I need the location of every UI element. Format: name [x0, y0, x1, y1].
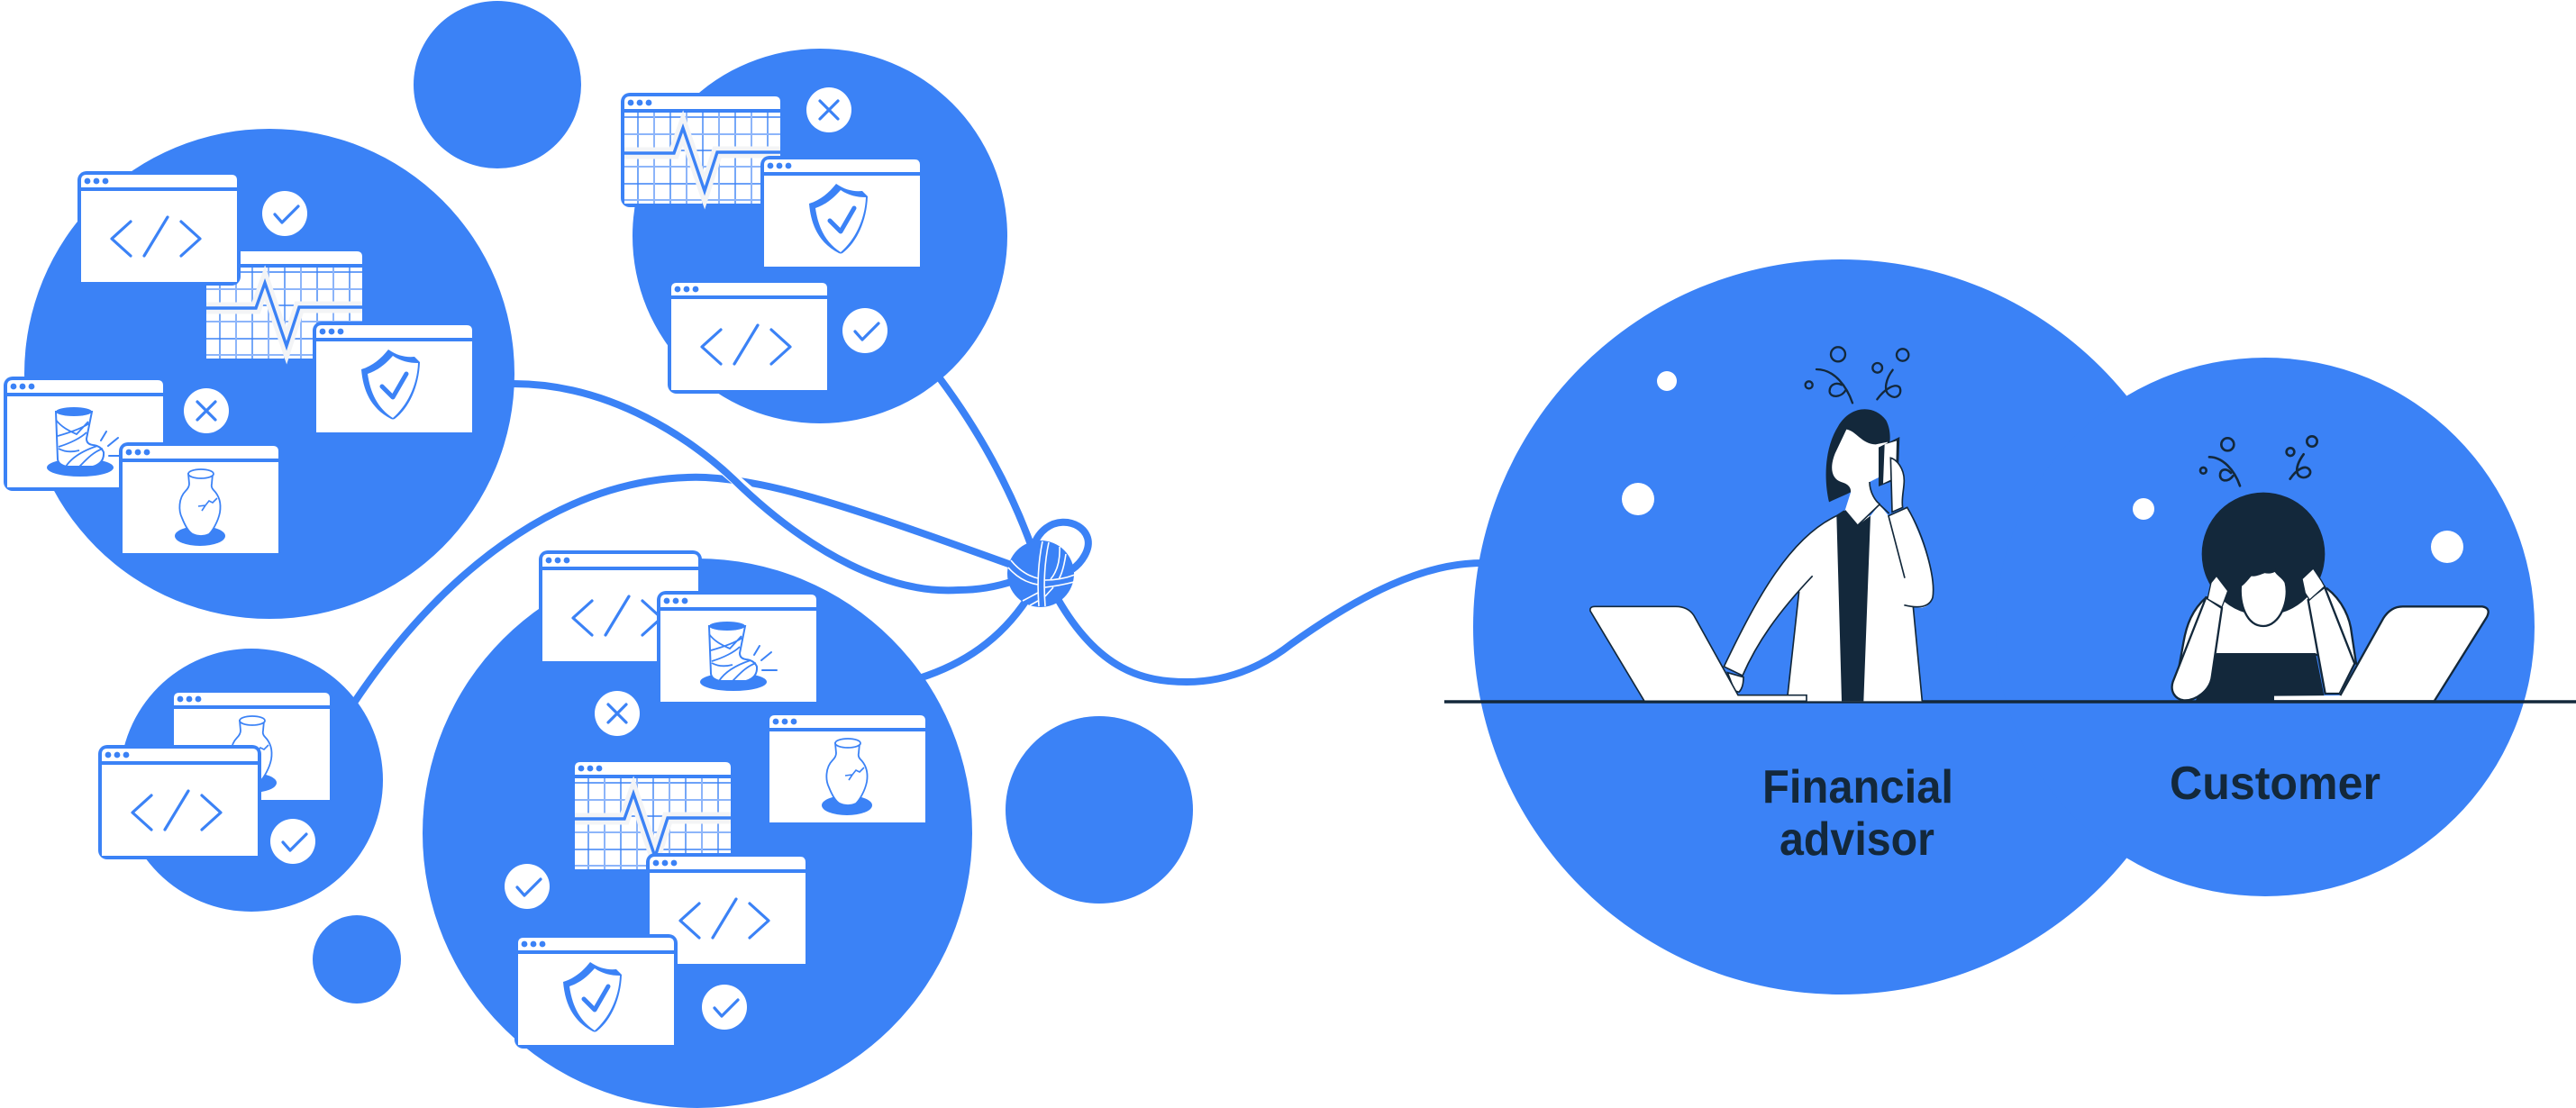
window: shield — [313, 322, 476, 436]
window: chart — [203, 248, 366, 362]
coat — [1724, 504, 1933, 701]
right hand — [2302, 568, 2325, 600]
figure: financial advisor on the phone — [1590, 347, 1934, 701]
label: financial advisor: Financial — [1762, 761, 1953, 813]
hand — [1890, 458, 1904, 512]
icon: check — [262, 191, 307, 236]
laptop — [1590, 606, 1807, 701]
icon: cross — [806, 87, 851, 132]
icon: tangled yarn ball — [1007, 522, 1088, 607]
connecting lines between system clusters and the tangled ball — [354, 378, 1482, 703]
phone — [1879, 437, 1899, 486]
window: cracked vase — [119, 442, 282, 557]
window: code — [77, 171, 241, 286]
icon: cross — [184, 388, 229, 433]
panel: top middle system cluster — [621, 49, 1007, 423]
window: cracked vase — [766, 712, 929, 826]
icon: check — [270, 819, 315, 864]
icon: check — [505, 864, 550, 909]
face and neck — [1832, 430, 1888, 525]
icon: confusion squiggles — [2200, 436, 2317, 486]
window: cracked vase — [170, 689, 333, 804]
label: financial advisor: advisor — [1780, 813, 1934, 866]
shoulders — [2178, 588, 2356, 676]
coat outlines — [1724, 482, 1934, 701]
face — [2241, 570, 2287, 626]
laptop outline — [2274, 606, 2489, 701]
decorative white dots — [1622, 371, 2463, 563]
window: code — [539, 550, 702, 665]
window: cast foot — [657, 591, 820, 705]
circle: top small decoration — [414, 1, 581, 168]
window: code — [668, 279, 831, 394]
window: chart — [621, 93, 784, 207]
panel: lower left system cluster — [98, 649, 383, 912]
panel: bottom middle system cluster — [423, 550, 972, 1108]
window: code — [646, 853, 809, 967]
hair — [1826, 409, 1890, 502]
window: chart — [571, 758, 734, 873]
dark shirt — [1836, 511, 1871, 701]
circle: tiny decoration — [313, 915, 401, 1004]
dark top — [2196, 653, 2326, 701]
circle: mid right decoration — [1006, 716, 1193, 904]
table line — [1444, 700, 2576, 704]
resting hand — [1727, 673, 1743, 692]
label: customer: Customer — [2170, 758, 2380, 810]
window: shield — [760, 156, 924, 270]
icon: cross — [595, 691, 640, 736]
window: code — [98, 745, 261, 859]
right arm — [2308, 587, 2354, 694]
panel: upper left system cluster — [4, 129, 514, 619]
panel: right background circles — [1473, 259, 2535, 994]
icon: check — [702, 985, 747, 1030]
left hand — [2207, 576, 2228, 607]
left arm — [2172, 597, 2222, 700]
figure: stressed customer — [2172, 436, 2489, 701]
window: shield — [514, 934, 678, 1049]
label: financial advisor — [1762, 761, 1953, 866]
icon: check — [842, 308, 887, 353]
window: cast foot — [4, 377, 167, 491]
laptop — [2274, 606, 2489, 701]
icon: confusion squiggles — [1806, 347, 1908, 403]
hair — [2202, 493, 2325, 615]
